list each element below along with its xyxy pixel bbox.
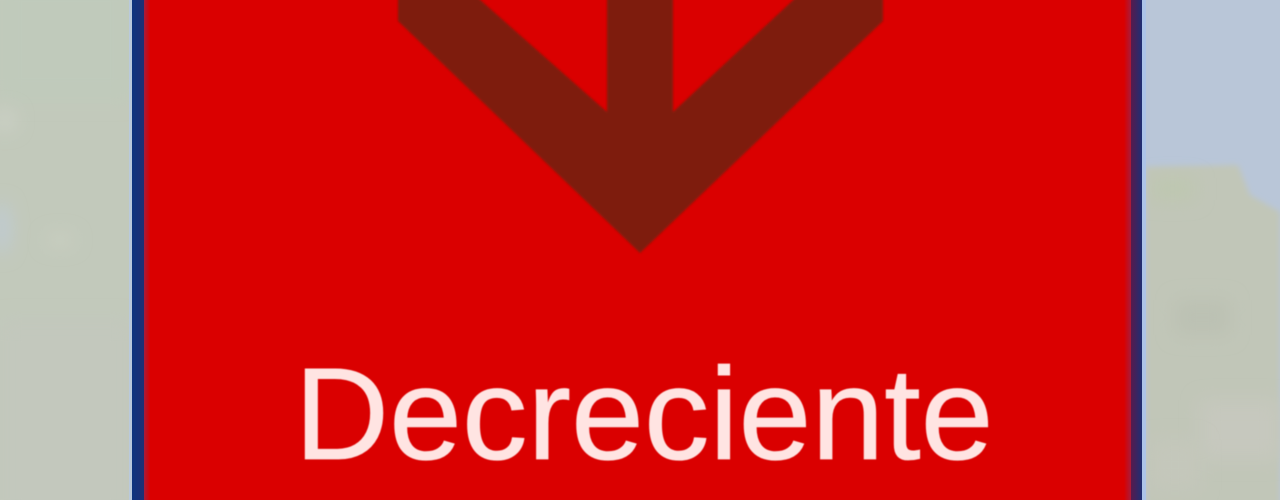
background: right sky and hill [1142,0,1280,500]
icon: downward arrow [398,0,883,253]
background: left landscape [0,0,132,500]
label: Decreciente: Decreciente [294,340,994,487]
panel: red card with navy border [132,0,1142,500]
